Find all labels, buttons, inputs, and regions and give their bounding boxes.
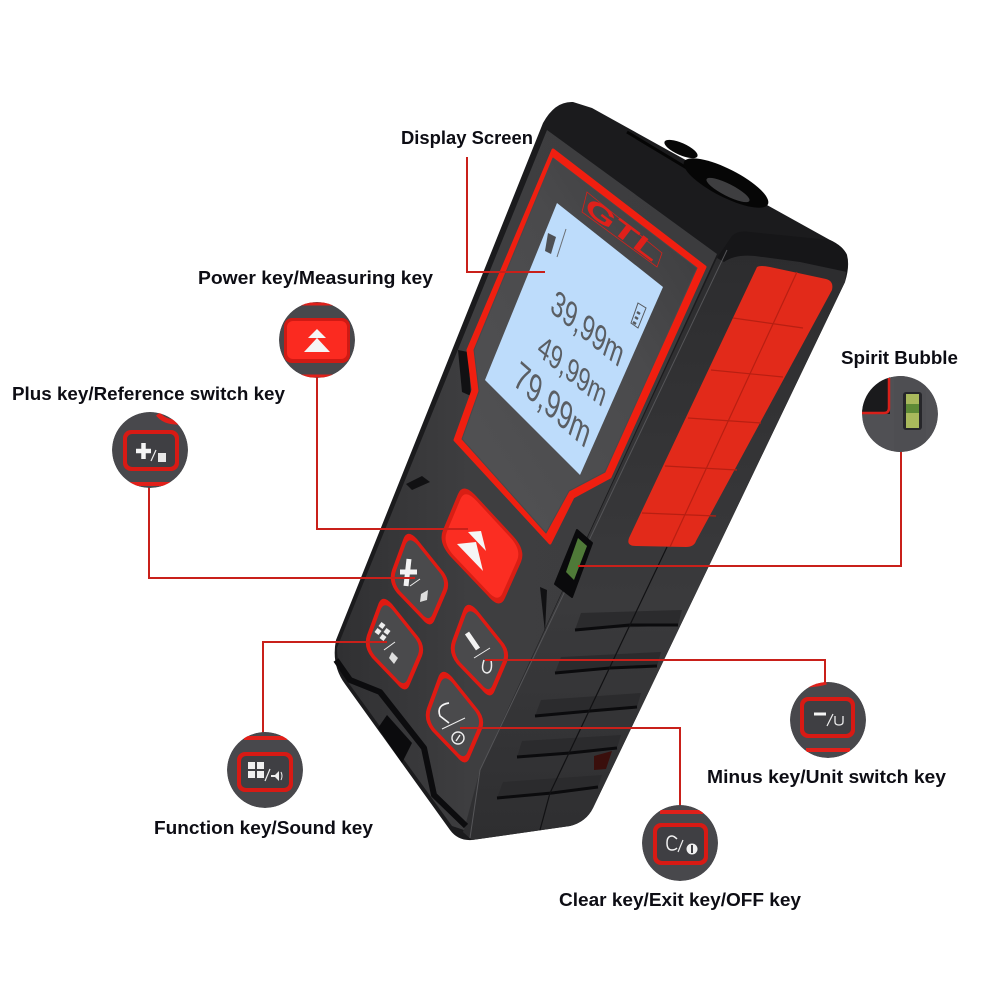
power / measuring key [442, 488, 522, 604]
GTL logo [582, 190, 662, 270]
callout: spirit bubble [578, 347, 958, 566]
callout: clear key [460, 728, 802, 910]
bottom groove [336, 660, 466, 826]
leader line: minus key [485, 660, 825, 684]
icon: spirit bubble close-up [860, 376, 938, 456]
infographic canvas [13, 102, 958, 910]
leader line: display screen [467, 157, 545, 272]
callout: display screen [401, 127, 545, 272]
label: spirit bubble: Spirit Bubble [841, 347, 958, 368]
red side panel [628, 266, 832, 547]
leader line: function key [263, 642, 387, 733]
label: power key: Power key/Measuring key [198, 267, 434, 288]
clear key [426, 672, 483, 762]
display bezel [455, 150, 705, 543]
LCD screen [485, 203, 663, 475]
top black band on the side [717, 232, 847, 272]
callout: plus key [12, 383, 415, 578]
device: laser distance meter [335, 102, 848, 840]
side edge highlight [470, 250, 727, 838]
laser reference icon [545, 229, 566, 257]
label: clear key: Clear key/Exit key/OFF key [559, 889, 802, 910]
icon: clear key close-up [642, 805, 718, 881]
label: minus key: Minus key/Unit switch key [707, 766, 947, 787]
callout: function key [154, 642, 387, 838]
leader line: power key [317, 376, 468, 529]
reading 3: 79,99m [509, 352, 596, 456]
icon: function key close-up [227, 732, 303, 808]
plus key [391, 534, 448, 624]
icon: plus key close-up [112, 412, 188, 488]
label: display screen: Display Screen [401, 127, 533, 148]
battery icon [631, 303, 646, 328]
bottom slot [378, 715, 412, 763]
icon: minus key close-up [790, 682, 866, 758]
label: function key: Function key/Sound key [154, 817, 374, 838]
left grip notches [406, 350, 547, 632]
top face details [627, 132, 774, 217]
side steps [497, 547, 682, 830]
callout: power key [198, 267, 468, 529]
device body silhouette [335, 102, 848, 840]
reading 1: 39,99m [546, 283, 629, 375]
side face [463, 247, 846, 840]
leader line: plus key [149, 487, 415, 578]
leader line: spirit bubble [578, 450, 901, 566]
label: plus key: Plus key/Reference switch key [12, 383, 286, 404]
minus key [451, 605, 508, 696]
reading 2: 49,99m [534, 327, 611, 414]
GTL logo: GTL [582, 190, 661, 270]
leader line: clear key [460, 728, 680, 806]
icon: power key close-up [279, 302, 355, 378]
front face [337, 130, 717, 830]
function key [366, 599, 423, 690]
spirit bubble slot [555, 530, 592, 597]
laser receiver window [594, 751, 612, 770]
callout: minus key [485, 660, 947, 787]
